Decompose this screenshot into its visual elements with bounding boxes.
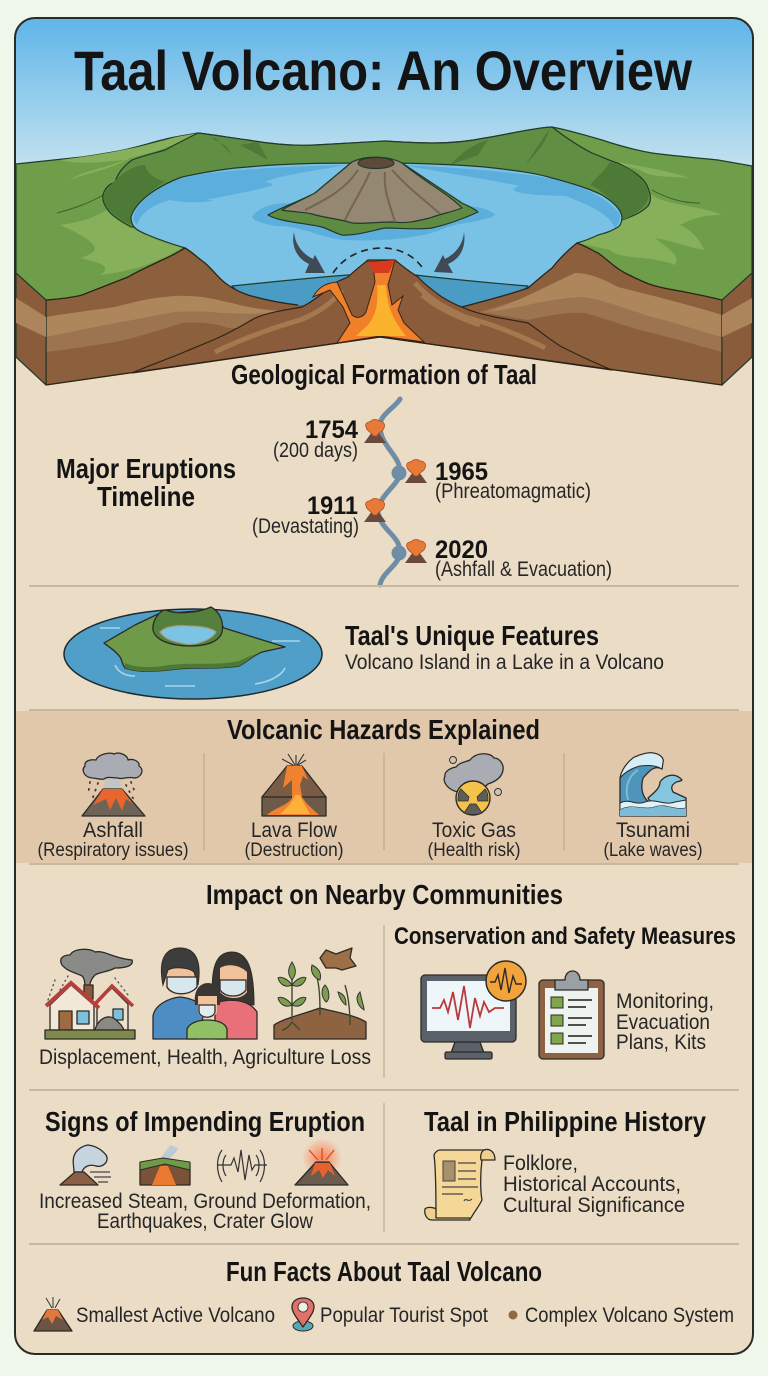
sparks bbox=[46, 1297, 60, 1308]
text: safety measures bbox=[616, 990, 714, 1054]
soil bbox=[274, 1008, 366, 1039]
icon: seismic monitor bbox=[421, 961, 526, 1059]
smoke cloud bbox=[61, 949, 132, 990]
heading: volcanic hazards: Volcanic Hazards Explained bbox=[227, 714, 540, 745]
radiation symbol bbox=[458, 789, 488, 814]
hazard label: toxic gas bbox=[428, 819, 520, 861]
rear roof bbox=[95, 986, 133, 1006]
icon: ashfall bbox=[82, 753, 145, 816]
text: history list: Historical Accounts, bbox=[503, 1173, 681, 1196]
dead brown leaf bbox=[320, 948, 356, 970]
monitor base bbox=[445, 1052, 492, 1059]
crater wall bbox=[153, 607, 223, 646]
light strata right bbox=[485, 273, 722, 337]
plant left bbox=[282, 970, 300, 1030]
ash mound bbox=[95, 1017, 124, 1030]
top curl bbox=[481, 1149, 495, 1160]
gas cloud bbox=[444, 754, 503, 793]
plant right leaves bbox=[338, 992, 364, 1010]
eruption icon 1911 bbox=[364, 498, 386, 522]
steam puff bbox=[162, 1145, 178, 1163]
cross-section front face bbox=[46, 243, 722, 385]
scroll bottom curl bbox=[425, 1207, 471, 1220]
cone bbox=[34, 1310, 72, 1331]
heading: major eruptions timeline: Timeline bbox=[97, 481, 195, 512]
timeline entry 1754: 1754 bbox=[305, 416, 358, 444]
father hair bbox=[161, 948, 199, 985]
radiation badge bbox=[456, 781, 490, 815]
text: safety measures: Monitoring, bbox=[616, 990, 714, 1013]
icon: ground deformation bbox=[140, 1145, 190, 1185]
fact: smallest active volcano: Smallest Active Volcano bbox=[76, 1304, 275, 1327]
rear house bbox=[97, 988, 128, 1030]
text: signs list bbox=[39, 1190, 371, 1233]
ridge outline of section bbox=[46, 243, 722, 385]
right arrow bbox=[434, 232, 464, 273]
pin hole bbox=[298, 1302, 308, 1312]
eruption icon 1965 bbox=[405, 460, 427, 483]
water bands bbox=[620, 800, 686, 810]
fact: popular tourist spot: Popular Tourist Spot bbox=[320, 1304, 488, 1327]
main roof bbox=[46, 983, 99, 1008]
wave stripes bbox=[627, 770, 638, 800]
small bubbles bbox=[450, 756, 502, 796]
left arrow bbox=[293, 232, 325, 273]
lower lake water bbox=[231, 274, 529, 306]
hazard label: ashfall: Ashfall bbox=[83, 819, 143, 842]
alert circle bbox=[486, 961, 526, 1001]
hazard label: lava flow bbox=[244, 819, 344, 861]
text: signs list: Increased Steam, Ground Deformation, bbox=[39, 1190, 371, 1213]
timeline entry 1911: 1911 bbox=[307, 492, 358, 520]
heading: Philippine history: Taal in Philippine History bbox=[424, 1106, 706, 1137]
island bbox=[104, 610, 285, 671]
door bbox=[59, 1011, 72, 1030]
lines bbox=[442, 1163, 478, 1201]
text: history list: Cultural Significance bbox=[503, 1194, 685, 1217]
sparks bbox=[309, 1148, 334, 1160]
timeline entry 1754: (200 days) bbox=[273, 439, 358, 462]
waveform bbox=[432, 986, 504, 1028]
icon: map pin bbox=[292, 1298, 314, 1331]
timeline entry 1965 bbox=[435, 458, 591, 503]
timeline entry 1911 bbox=[252, 492, 359, 538]
timeline entry 2020: (Ashfall & Evacuation) bbox=[435, 558, 612, 581]
ash column bbox=[104, 776, 121, 790]
pin body bbox=[292, 1298, 314, 1327]
lava bbox=[42, 1310, 63, 1324]
grass layer bbox=[140, 1158, 190, 1170]
icon: crops and loss bbox=[274, 948, 366, 1039]
image block bbox=[443, 1161, 455, 1181]
hazard label: lava flow: (Destruction) bbox=[244, 840, 344, 861]
heading: major eruptions timeline bbox=[56, 453, 236, 512]
ash dots bbox=[48, 976, 128, 1000]
hazard label: lava flow: Lava Flow bbox=[251, 819, 338, 842]
outer green land bbox=[16, 126, 752, 300]
hazard label: ashfall bbox=[38, 819, 188, 861]
cone bbox=[82, 789, 145, 816]
paper bbox=[545, 988, 598, 1053]
side face bands bbox=[16, 298, 752, 337]
fact: complex volcano system: Complex Volcano System bbox=[525, 1304, 734, 1327]
timeline entry 1754 bbox=[273, 416, 358, 462]
heading: fun facts: Fun Facts About Taal Volcano bbox=[226, 1256, 542, 1287]
mid strata right bbox=[480, 297, 722, 352]
slope crease lines bbox=[57, 190, 700, 213]
island green base bbox=[268, 162, 478, 235]
hazard label: tsunami bbox=[604, 819, 702, 861]
lava bbox=[93, 789, 133, 811]
scroll body bbox=[434, 1150, 484, 1218]
timeline entry 1965: 1965 bbox=[435, 458, 488, 486]
section: unique features text bbox=[345, 620, 664, 674]
clip bbox=[555, 971, 588, 990]
plant mid bbox=[315, 970, 320, 1015]
rock strata bbox=[46, 273, 722, 352]
hero illustration: geological cross-section of Taal bbox=[15, 18, 753, 385]
mother body bbox=[215, 1000, 257, 1039]
wind lines bbox=[90, 1172, 111, 1182]
cone bbox=[295, 1162, 348, 1185]
lava conduit bbox=[313, 260, 424, 343]
pressure arrows bbox=[293, 232, 464, 273]
lava bbox=[152, 1166, 176, 1185]
heading: impact on communities: Impact on Nearby Communities bbox=[206, 879, 563, 910]
father body bbox=[153, 997, 205, 1039]
hazard label: toxic gas: (Health risk) bbox=[428, 840, 520, 861]
icon: damaged houses with ash cloud bbox=[45, 949, 135, 1039]
check boxes bbox=[551, 997, 563, 1044]
icon: earthquakes bbox=[218, 1150, 267, 1182]
monitor casing bbox=[421, 975, 516, 1042]
light strata left bbox=[46, 296, 298, 337]
timeline river bbox=[378, 399, 400, 585]
glow bbox=[302, 1138, 342, 1178]
child face bbox=[198, 996, 217, 1018]
hazard label: toxic gas: Toxic Gas bbox=[432, 819, 516, 842]
alert waveform bbox=[490, 968, 522, 993]
text: impact list: Displacement, Health, Agriculture Loss bbox=[39, 1046, 371, 1069]
mid strata left bbox=[46, 308, 278, 352]
screen bbox=[427, 981, 510, 1031]
hazard label: tsunami: (Lake waves) bbox=[604, 840, 702, 861]
wave highlight bbox=[620, 753, 663, 778]
block front face bbox=[262, 797, 326, 816]
chimney bbox=[84, 985, 93, 999]
plant left leaves bbox=[278, 962, 306, 1006]
child mask bbox=[199, 1005, 215, 1017]
mountain strata bbox=[215, 283, 545, 352]
father face bbox=[166, 960, 196, 996]
dark ravines on inner wall bbox=[104, 128, 649, 225]
panel: volcanic hazards band bbox=[16, 711, 752, 863]
eruption sparks bbox=[282, 754, 306, 765]
icon: toxic gas bbox=[444, 754, 503, 815]
heading: signs of eruption: Signs of Impending Eruption bbox=[45, 1106, 365, 1137]
text: history list: Folklore, bbox=[503, 1152, 578, 1175]
light green slopes bbox=[60, 133, 722, 275]
timeline entry 2020: 2020 bbox=[435, 536, 488, 564]
main house bbox=[50, 985, 94, 1030]
center mountain bbox=[132, 260, 612, 373]
list lines bbox=[568, 1000, 592, 1043]
water ripples bbox=[100, 628, 300, 686]
eruption icon 2020 bbox=[405, 540, 427, 563]
volcano island bbox=[268, 157, 478, 235]
timeline entry 1911: (Devastating) bbox=[252, 515, 359, 538]
text: safety measures: Plans, Kits bbox=[616, 1031, 706, 1054]
island shaded shore bbox=[125, 652, 262, 671]
lava bbox=[311, 1163, 335, 1178]
mother mask bbox=[220, 980, 246, 996]
sky bbox=[15, 18, 753, 168]
section: unique features text: Taal's Unique Features bbox=[345, 620, 599, 651]
icon: tsunami bbox=[620, 753, 686, 816]
window bbox=[77, 1011, 89, 1024]
pin base bbox=[293, 1321, 313, 1331]
plant right bbox=[345, 985, 350, 1025]
title: Taal Volcano: An Overview bbox=[74, 39, 692, 102]
dashed uplift arc bbox=[333, 248, 424, 273]
ash cloud bbox=[83, 753, 142, 779]
brown cone bbox=[282, 157, 462, 223]
big wave bbox=[620, 753, 686, 816]
caldera lake bbox=[131, 163, 622, 300]
icon: evacuation checklist clipboard bbox=[539, 971, 604, 1059]
crater inner wall bbox=[103, 127, 650, 227]
icon: lava flow bbox=[262, 754, 326, 816]
lava stream bbox=[267, 766, 319, 815]
lava core bbox=[280, 795, 310, 814]
text: history list bbox=[503, 1152, 685, 1217]
board bbox=[539, 980, 604, 1059]
crater bbox=[358, 158, 394, 168]
ash specks bbox=[88, 782, 136, 802]
lake ellipse bbox=[64, 609, 322, 699]
right side face bbox=[722, 273, 752, 385]
window rear bbox=[113, 1009, 123, 1020]
cone ridges bbox=[305, 170, 440, 222]
hazard label: ashfall: (Respiratory issues) bbox=[38, 840, 188, 861]
lake shadow patches bbox=[134, 165, 620, 240]
plant mid leaves bbox=[311, 965, 329, 1002]
mother hair bbox=[212, 952, 254, 1005]
eruption icon 1754 bbox=[364, 420, 386, 443]
icon: small volcano bbox=[34, 1297, 72, 1331]
timeline entry 1965: (Phreatomagmatic) bbox=[435, 480, 591, 503]
water base bbox=[620, 806, 686, 816]
cone bbox=[60, 1172, 98, 1185]
ground bbox=[45, 1030, 135, 1039]
text: signs list: Earthquakes, Crater Glow bbox=[97, 1210, 314, 1233]
illustration: volcano island in lake bbox=[64, 607, 322, 699]
father mask bbox=[167, 977, 197, 994]
left side face bbox=[16, 273, 46, 385]
text: safety measures: Evacuation bbox=[616, 1011, 710, 1034]
icon: historic scroll bbox=[425, 1149, 495, 1220]
child body bbox=[187, 1020, 227, 1039]
block bbox=[140, 1160, 190, 1185]
monitor stand bbox=[451, 1042, 484, 1053]
child hair bbox=[195, 983, 220, 1005]
section: unique features text: Volcano Island in a Lake in a Volcano bbox=[345, 651, 664, 674]
cut block back cone bbox=[262, 766, 326, 797]
timeline nodes bbox=[392, 466, 406, 560]
heading: geological formation: Geological Formation of Taal bbox=[231, 359, 537, 390]
icon: increased steam bbox=[60, 1145, 111, 1185]
crater lake bbox=[160, 626, 216, 644]
steam plume bbox=[73, 1145, 107, 1172]
icon: crater glow bbox=[295, 1138, 348, 1185]
icon: bullet dot bbox=[508, 1310, 518, 1320]
icon: masked family bbox=[153, 948, 257, 1039]
hazard label: tsunami: Tsunami bbox=[616, 819, 690, 842]
small wave bbox=[648, 775, 686, 816]
heading: major eruptions timeline: Major Eruptions bbox=[56, 453, 236, 484]
mother face bbox=[220, 965, 247, 998]
timeline entry 2020 bbox=[435, 536, 612, 581]
